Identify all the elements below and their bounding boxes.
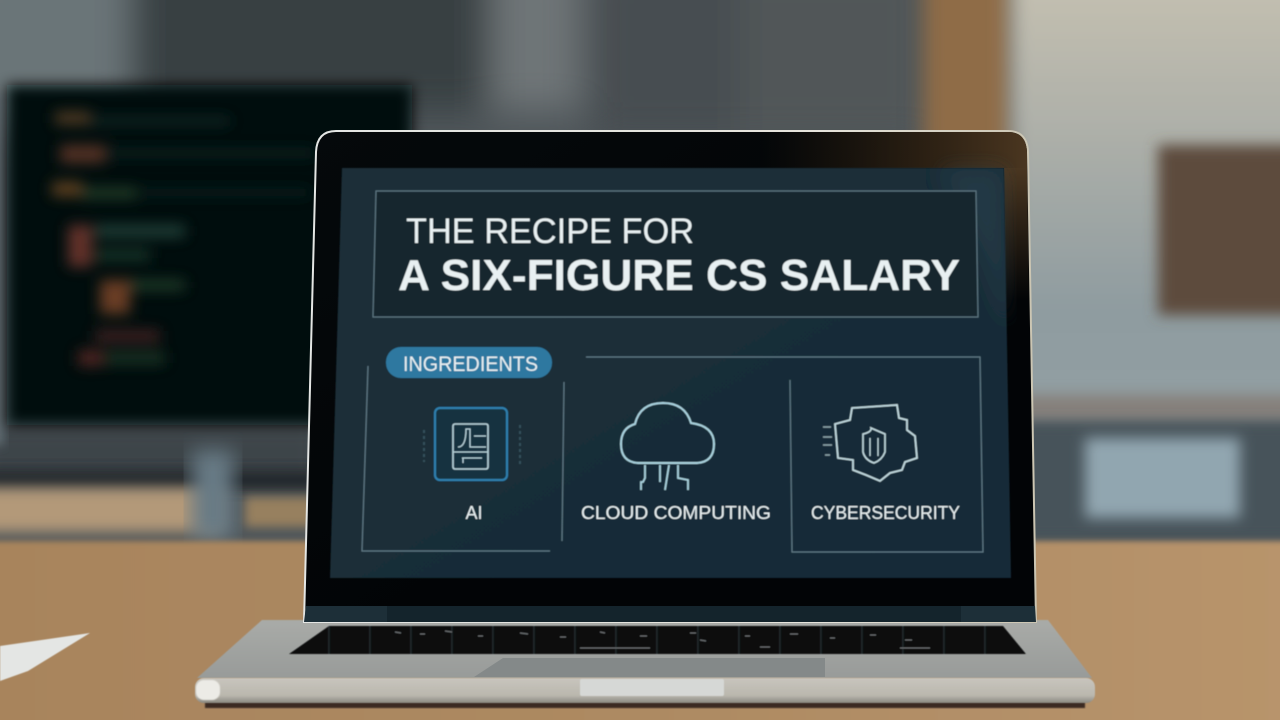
- laptop: [195, 131, 1095, 708]
- trackpad: [474, 658, 825, 677]
- title line 1: THE RECIPE FOR: [406, 212, 694, 251]
- front lip: [195, 678, 1095, 703]
- label: AI: AI: [465, 503, 483, 523]
- ingredients frame lines: [362, 357, 983, 552]
- title line 2: A SIX-FIGURE CS SALARY: [398, 251, 960, 300]
- cloud computing ingredient: [581, 403, 771, 523]
- icon: shield on chip: [823, 405, 917, 481]
- icon: cloud: [621, 403, 714, 490]
- blurred monitor with code: [0, 85, 412, 445]
- title box: [373, 191, 978, 317]
- cybersecurity ingredient: [811, 405, 960, 523]
- laptop lid: [304, 131, 1036, 622]
- laptop screen: [330, 168, 1011, 578]
- label: cloud computing: CLOUD COMPUTING: [581, 503, 771, 523]
- ingredients pill: [386, 347, 552, 378]
- AI ingredient: [424, 408, 520, 523]
- icon: AI chip: [424, 408, 520, 480]
- lip notch highlight: [580, 679, 724, 696]
- keyboard: [289, 626, 1026, 654]
- desk surface: [0, 541, 1280, 720]
- hinge strip: [304, 606, 1036, 622]
- paper on desk: [0, 633, 90, 681]
- blurred desk items: [0, 425, 320, 540]
- label: cybersecurity: CYBERSECURITY: [811, 503, 960, 523]
- laptop base: [195, 620, 1095, 708]
- blurred picture frame: [1158, 145, 1280, 315]
- blurred shelf and box: [1010, 395, 1280, 540]
- ingredients pill: INGREDIENTS: [403, 353, 538, 376]
